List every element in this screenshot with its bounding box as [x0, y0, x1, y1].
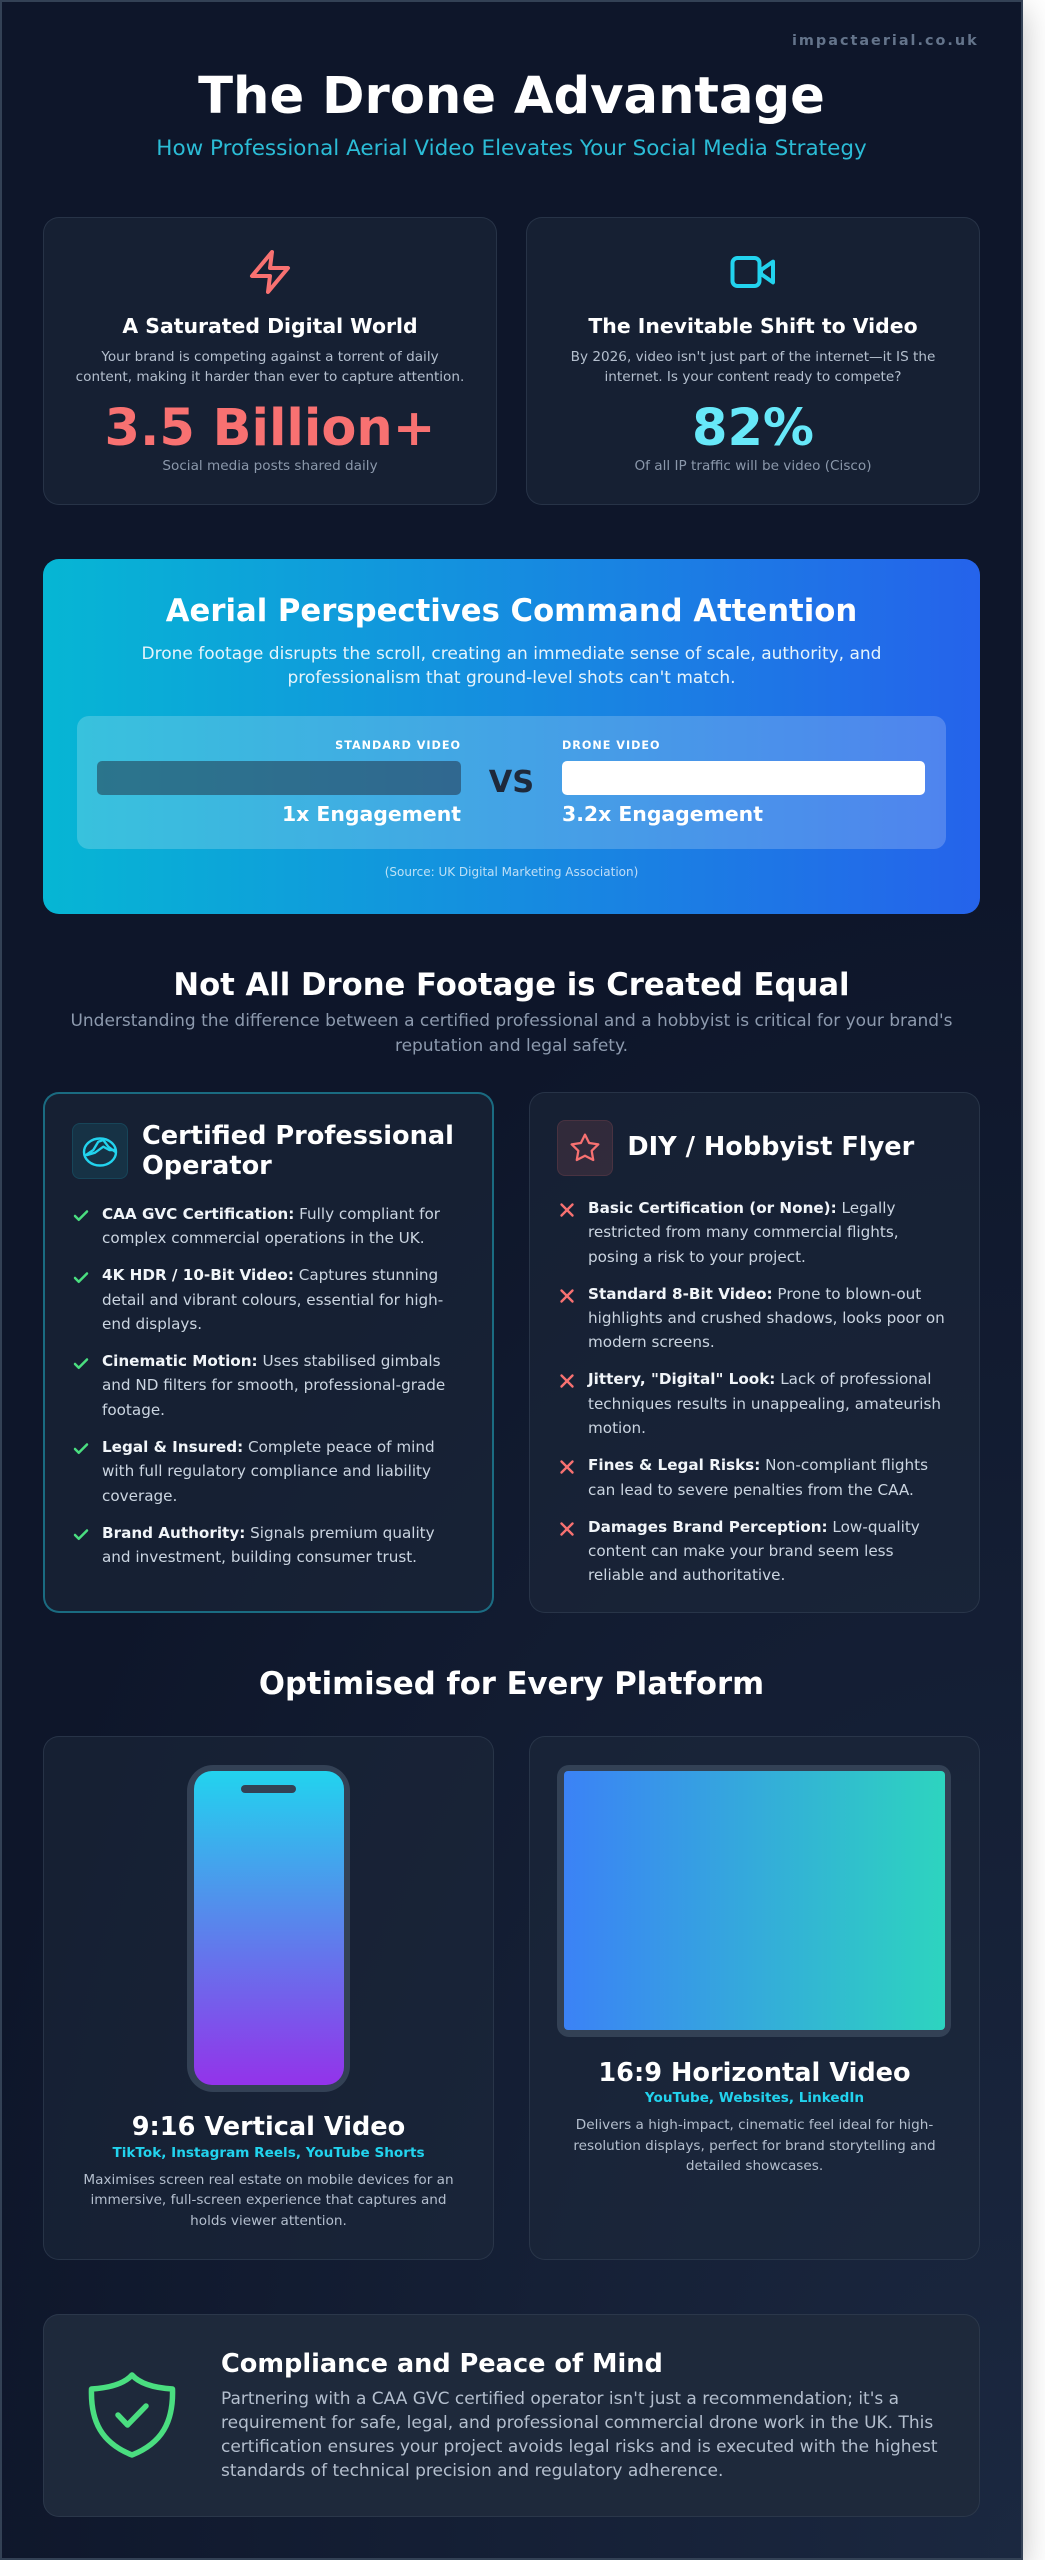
stat label: Social media posts shared daily: [162, 458, 378, 474]
heading: A Saturated Digital World: [122, 314, 418, 338]
icon: drone badge: [72, 1123, 128, 1179]
bar: standard video: [97, 761, 461, 795]
subtitle: How Professional Aerial Video Elevates Your Social Media Strategy: [156, 136, 867, 161]
item: perception: content can make your brand seem less: [588, 1542, 894, 1560]
item: fines: [560, 1456, 928, 1499]
description: [83, 2172, 454, 2229]
panel: diy hobbyist: [529, 1092, 980, 1613]
website label: impactaerial.co.uk: [792, 33, 979, 49]
section intro: [70, 1011, 953, 1056]
item: video: highlights and crushed shadows, looks poor on: [588, 1309, 945, 1327]
title: The Drone Advantage: [198, 66, 825, 126]
panel: shift to video: [526, 217, 980, 505]
description: Partnering with a CAA GVC certified operator isn't just a recommendation; it's a: [221, 2389, 899, 2409]
description: resolution displays, perfect for brand storytelling and: [573, 2138, 936, 2154]
description: Drone footage disrupts the scroll, creating an immediate sense of scale, authority, and: [142, 644, 881, 664]
heading: Aerial Perspectives Command Attention: [166, 594, 857, 629]
icon: lightning bolt: [250, 250, 290, 294]
icon: video camera: [730, 256, 775, 288]
description: professionalism that ground-level shots can't match.: [288, 668, 736, 688]
platforms: YouTube, Websites, LinkedIn: [645, 2090, 864, 2106]
label: drone video: DRONE VIDEO: [562, 739, 661, 752]
heading: Compliance and Peace of Mind: [221, 2349, 663, 2379]
description: [571, 349, 935, 385]
source note: (Source: UK Digital Marketing Association): [385, 865, 638, 879]
item: video quality: detail and vibrant colours, essential for high-: [102, 1291, 443, 1309]
item: fines: can lead to severe penalties from the CAA.: [588, 1481, 914, 1499]
tablet mockup: [557, 1764, 951, 2037]
phone notch: [241, 1785, 296, 1793]
value: standard engagement: 1x Engagement: [282, 802, 461, 826]
item: look: techniques results in unappealing, amateurish: [588, 1395, 941, 1413]
item: perception: [560, 1518, 920, 1584]
item: certification: complex commercial operations in the UK.: [102, 1229, 425, 1247]
item: look: Jittery, "Digital" Look: Lack of professional: [588, 1370, 931, 1388]
item: perception: reliable and authoritative.: [588, 1566, 785, 1584]
item: video quality: 4K HDR / 10-Bit Video: Captures stunning: [102, 1266, 438, 1284]
description: certification ensures your project avoids legal risks and is executed with the highest: [221, 2437, 938, 2457]
item: certification: Basic Certification (or None): Legally: [588, 1199, 895, 1217]
description: [76, 349, 464, 385]
value: drone engagement: 3.2x Engagement: [562, 802, 763, 826]
description: detailed showcases.: [686, 2158, 823, 2174]
item: certification: [560, 1199, 899, 1266]
feature list: [74, 1205, 445, 1566]
heading: 16:9 Horizontal Video: [598, 2058, 911, 2088]
item: certification: CAA GVC Certification: Fully compliant for: [102, 1205, 440, 1223]
stat: 3.5 billion: 3.5 Billion+: [104, 399, 435, 458]
heading: 9:16 Vertical Video: [132, 2112, 405, 2142]
panel: compliance: [43, 2314, 980, 2517]
heading: Certified Professional: [142, 1121, 454, 1151]
risk list: [560, 1199, 945, 1584]
phone mockup: [187, 1764, 350, 2092]
section intro: reputation and legal safety.: [395, 1036, 628, 1056]
item: video: [560, 1285, 945, 1351]
panel: saturated digital world: [43, 217, 497, 505]
item: perception: Damages Brand Perception: Low-quality: [588, 1518, 920, 1536]
heading: The Inevitable Shift to Video: [588, 314, 918, 338]
description: requirement for safe, legal, and professional commercial drone work in the UK. This: [221, 2413, 933, 2433]
description: Delivers a high-impact, cinematic feel ideal for high-: [576, 2117, 933, 2133]
item: certification: posing a risk to your project.: [588, 1248, 806, 1266]
description: [573, 2117, 936, 2174]
description: By 2026, video isn't just part of the internet—it IS the: [571, 349, 935, 365]
platforms: TikTok, Instagram Reels, YouTube Shorts: [112, 2145, 425, 2161]
section intro: Understanding the difference between a certified professional and a hobbyist is critical for your brand's: [70, 1011, 953, 1031]
item: look: [560, 1370, 941, 1437]
item: authority: Brand Authority: Signals premium quality: [102, 1524, 435, 1542]
item: legal: with full regulatory compliance and liability: [102, 1462, 431, 1480]
icon: shield check: [88, 2372, 176, 2458]
item: certification: [74, 1205, 440, 1247]
item: motion: [74, 1352, 445, 1419]
phone screen: [194, 1771, 344, 2085]
description: [221, 2389, 938, 2481]
section heading: platforms: Optimised for Every Platform: [259, 1667, 764, 1702]
item: motion: and ND filters for smooth, professional-grade: [102, 1376, 445, 1394]
heading: [142, 1121, 454, 1181]
heading: Operator: [142, 1151, 272, 1181]
panel: aerial perspectives: [43, 559, 980, 914]
panel: horizontal video: [529, 1736, 980, 2260]
panel: certified professional: [43, 1092, 494, 1613]
label: standard video: STANDARD VIDEO: [335, 739, 461, 752]
description: immersive, full-screen experience that captures and: [90, 2192, 447, 2208]
stat: 82 percent: 82%: [692, 399, 814, 458]
stat label: Of all IP traffic will be video (Cisco): [634, 458, 872, 474]
item: motion: footage.: [102, 1401, 165, 1419]
item: video: modern screens.: [588, 1333, 715, 1351]
item: authority: [74, 1524, 435, 1566]
vs label: VS: [489, 765, 534, 800]
item: legal: Legal & Insured: Complete peace of mind: [102, 1438, 435, 1456]
item: look: motion.: [588, 1419, 646, 1437]
section heading: drone footage: Not All Drone Footage is Created Equal: [173, 968, 850, 1003]
description: Your brand is competing against a torrent of daily: [101, 349, 439, 365]
tablet screen: [564, 1771, 945, 2030]
description: [142, 644, 881, 688]
item: motion: Cinematic Motion: Uses stabilised gimbals: [102, 1352, 441, 1370]
icon: star: [556, 1120, 612, 1176]
bar: drone video: [562, 761, 925, 795]
item: video quality: [74, 1266, 443, 1333]
description: internet. Is your content ready to compete?: [605, 369, 901, 385]
item: legal: [74, 1438, 435, 1505]
item: video: Standard 8-Bit Video: Prone to blown-out: [588, 1285, 921, 1303]
item: certification: restricted from many commercial flights,: [588, 1223, 899, 1241]
description: holds viewer attention.: [190, 2213, 347, 2229]
description: content, making it harder than ever to capture attention.: [76, 369, 464, 385]
item: fines: Fines & Legal Risks: Non-compliant flights: [588, 1456, 928, 1474]
item: authority: and investment, building consumer trust.: [102, 1548, 417, 1566]
item: legal: coverage.: [102, 1487, 177, 1505]
comparison panel: [77, 716, 946, 849]
description: standards of technical precision and regulatory adherence.: [221, 2461, 723, 2481]
description: Maximises screen real estate on mobile devices for an: [83, 2172, 454, 2188]
item: video quality: end displays.: [102, 1315, 202, 1333]
heading: DIY / Hobbyist Flyer: [627, 1132, 914, 1162]
panel: vertical video: [43, 1736, 494, 2260]
